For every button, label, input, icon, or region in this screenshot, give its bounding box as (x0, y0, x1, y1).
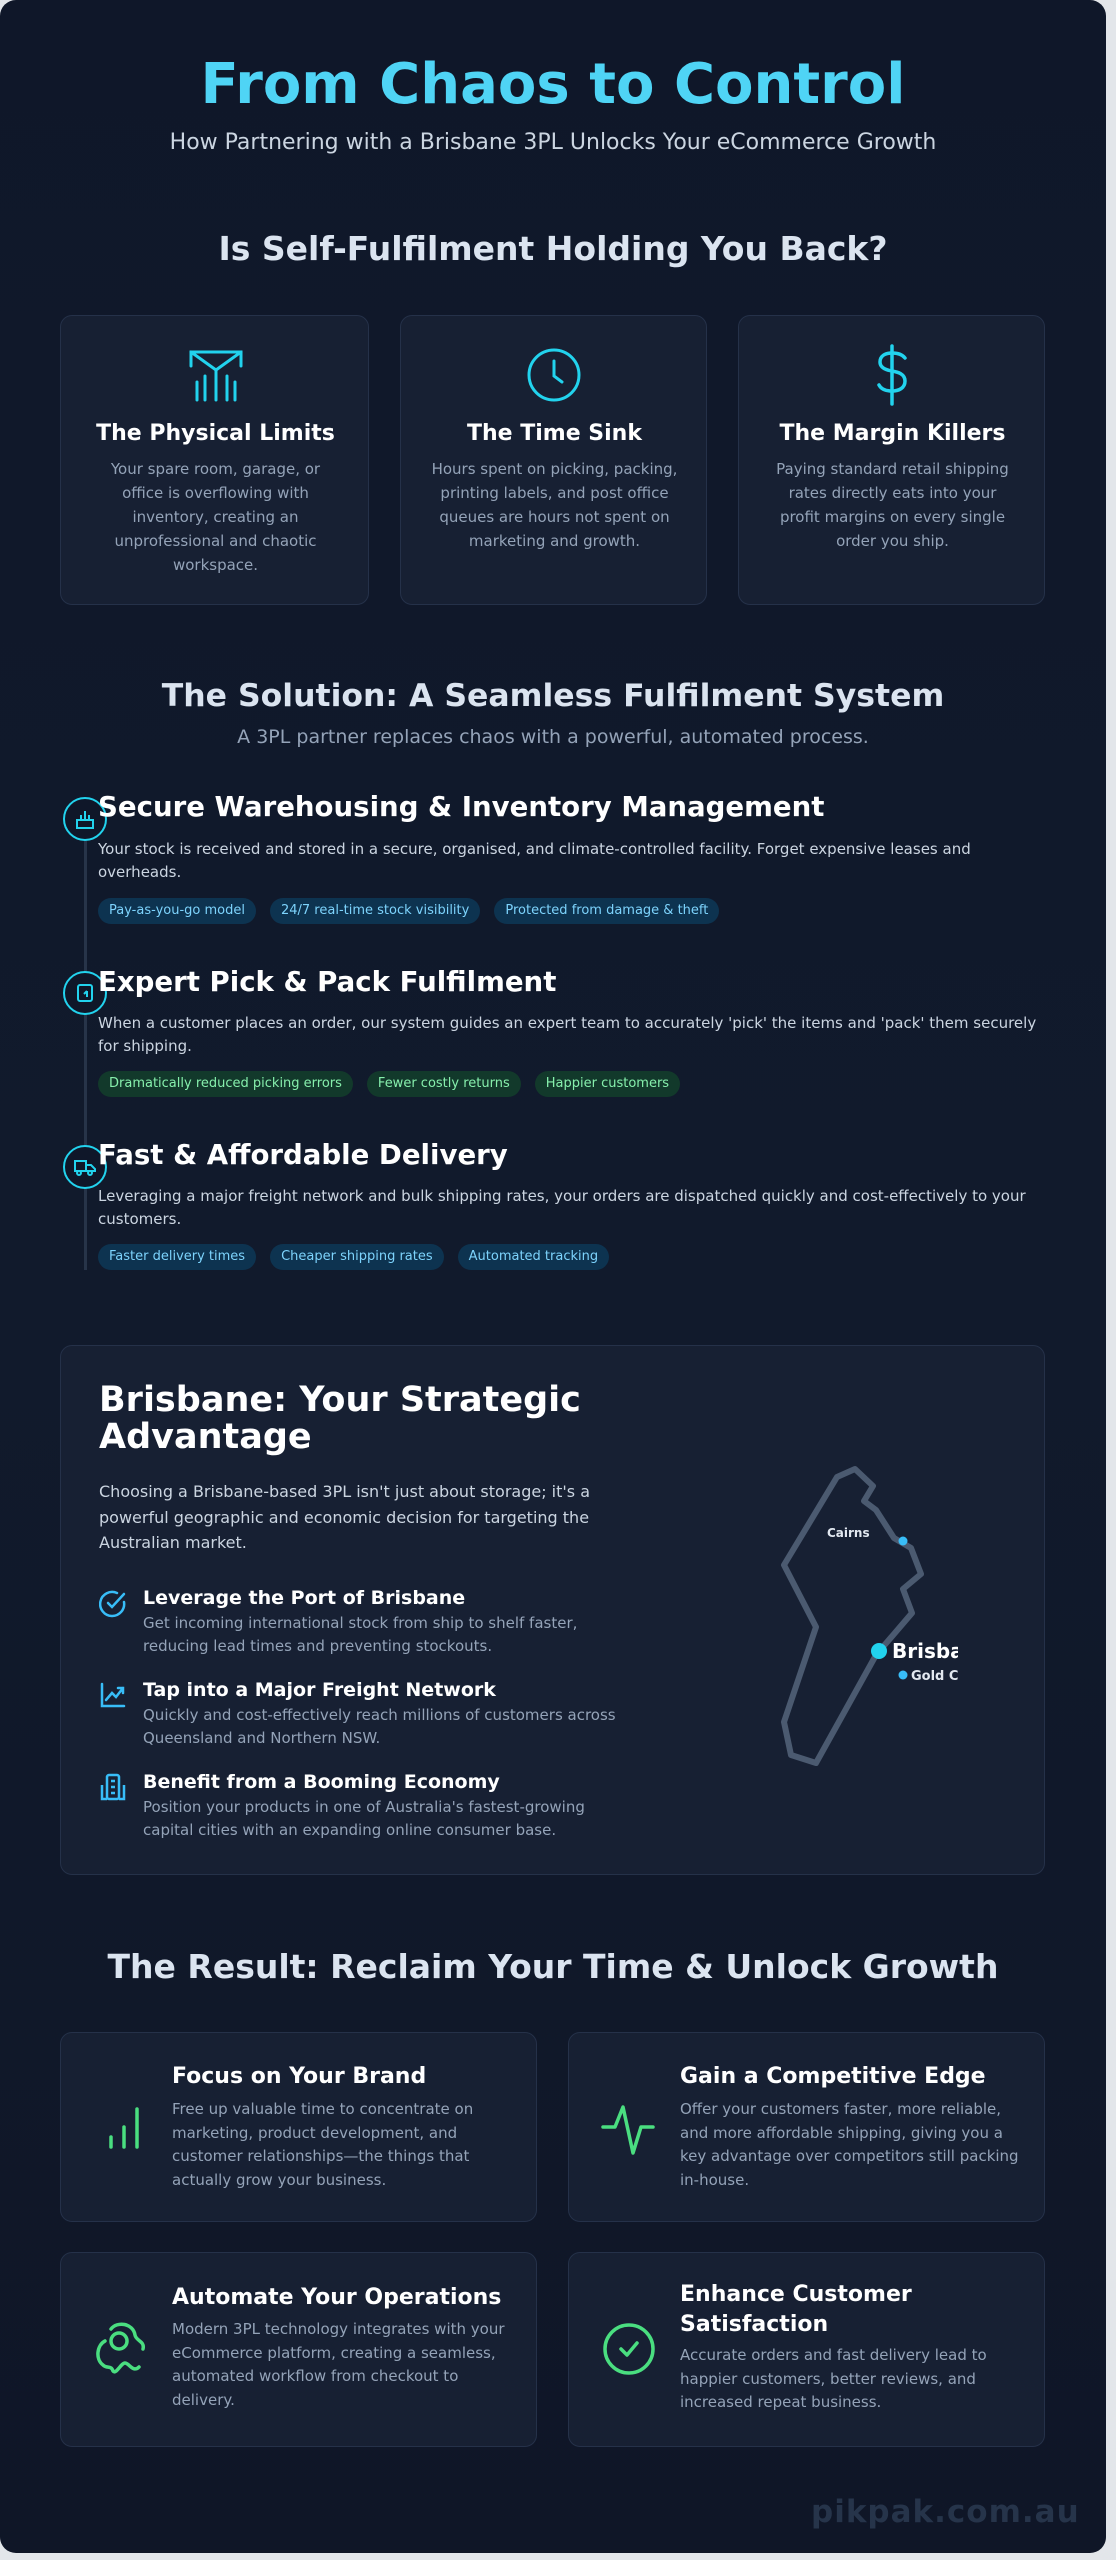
result: edge: Offer your customers faster, more reliable, and more affordable shipping, giving you a key advantage over competitors still packing in-house. (680, 2100, 1019, 2188)
step 1 text: Your stock is received and stored in a secure, organised, and climate-controlled facility. Forget expensive leases and overheads. (98, 840, 971, 881)
brisbane title: Advantage (99, 1417, 312, 1457)
icon: pulse (601, 2105, 655, 2155)
step 2 tags: Happier customers (546, 1076, 669, 1091)
footer brand: pikpak.com.au (811, 2494, 1080, 2530)
icon: clock (528, 348, 580, 402)
step 2 icon (63, 971, 107, 1015)
panel: margin killers: The Margin Killers (780, 421, 1005, 446)
timeline line (84, 800, 87, 1270)
result: satisfaction (568, 2252, 1045, 2447)
step 3 tags: Faster delivery times (109, 1249, 245, 1264)
step 2 text: When a customer places an order, our system guides an expert team to accurately 'pick' the items and 'pack' them securely for shipping. (98, 1014, 1036, 1055)
title: From Chaos to Control (201, 52, 905, 117)
icon: building (100, 1774, 126, 1800)
item: port (99, 1587, 577, 1655)
icon: automation (96, 2322, 145, 2374)
step 2 tags: Fewer costly returns (378, 1076, 510, 1091)
result: edge: Gain a Competitive Edge (680, 2064, 986, 2089)
step 1 tags: 24/7 real-time stock visibility (281, 903, 469, 918)
step 1 tags: Pay-as-you-go model (109, 903, 245, 918)
brisbane title: Brisbane: Your Strategic (99, 1380, 581, 1420)
step 3 tags: Cheaper shipping rates (281, 1249, 433, 1264)
step 2 tags (98, 1071, 680, 1097)
panel: time sink (400, 315, 707, 605)
item: freight: Tap into a Major Freight Network (143, 1679, 496, 1701)
step 3 title: Fast & Affordable Delivery (98, 1138, 508, 1171)
panel: physical limits: The Physical Limits (96, 421, 335, 446)
icon: warehouse (189, 350, 243, 402)
step 1 title: Secure Warehousing & Inventory Management (98, 790, 824, 823)
panel: margin killers (738, 315, 1045, 605)
icon: chart (100, 1682, 126, 1708)
item: economy (100, 1771, 585, 1839)
result: satisfaction: Accurate orders and fast delivery lead to happier customers, better reviews, and increased repeat business. (680, 2346, 987, 2411)
panel: physical limits: Your spare room, garage, or office is overflowing with inventory, creating an unprofessional and chaotic workspace. (111, 460, 320, 574)
heading: result: The Result: Reclaim Your Time & Unlock Growth (108, 1947, 998, 1986)
brisbane title (99, 1380, 581, 1457)
item: economy: Benefit from a Booming Economy (143, 1771, 500, 1793)
subtitle: How Partnering with a Brisbane 3PL Unlocks Your eCommerce Growth (170, 130, 936, 155)
panel: margin killers: Paying standard retail shipping rates directly eats into your profit margins on every single order you ship. (776, 460, 1009, 550)
map: queensland (781, 1466, 958, 1766)
step 2 title: Expert Pick & Pack Fulfilment (98, 965, 556, 998)
brisbane intro: Choosing a Brisbane-based 3PL isn't just about storage; it's a powerful geographic and economic decision for targeting the Australian market. (99, 1482, 590, 1552)
icon: check circle (603, 2323, 655, 2375)
result: satisfaction: Enhance Customer Satisfaction (680, 2282, 912, 2337)
step 3 tags: Automated tracking (469, 1249, 598, 1264)
item: economy: Position your products in one of Australia's fastest-growing capital cities with an expanding online consumer base. (143, 1798, 585, 1839)
step 3 text: Leveraging a major freight network and bulk shipping rates, your orders are dispatched quickly and cost-effectively to your customers. (98, 1187, 1026, 1228)
map: queensland: Cairns (827, 1526, 870, 1540)
step 1 tags (98, 898, 719, 924)
step 1 tags: Protected from damage & theft (505, 903, 708, 918)
result: brand: Focus on Your Brand (172, 2064, 426, 2089)
result: brand: Free up valuable time to concentrate on marketing, product development, and customer relationships—the things that actually grow your business. (172, 2100, 473, 2188)
step 1 icon (63, 797, 107, 841)
item: freight (100, 1679, 616, 1747)
panel: time sink: The Time Sink (467, 421, 642, 446)
step 2 tags: Dramatically reduced picking errors (109, 1076, 342, 1091)
solution subtitle: A 3PL partner replaces chaos with a powerful, automated process. (237, 726, 869, 748)
step 3 tags (98, 1244, 609, 1270)
panel: brisbane advantage (60, 1345, 1045, 1875)
result: automate (60, 2252, 537, 2447)
result: edge (568, 2032, 1045, 2222)
heading: solution: The Solution: A Seamless Fulfilment System (162, 678, 944, 714)
icon: dollar (877, 344, 907, 406)
item: port: Leverage the Port of Brisbane (143, 1587, 465, 1609)
result: automate: Modern 3PL technology integrates with your eCommerce platform, creating a seamless, automated workflow from checkout to delivery. (172, 2320, 504, 2408)
icon: check (99, 1590, 126, 1618)
result: brand (60, 2032, 537, 2222)
item: freight: Quickly and cost-effectively reach millions of customers across Queensland and Northern NSW. (143, 1706, 616, 1747)
step 3 icon (63, 1145, 107, 1189)
item: port: Get incoming international stock from ship to shelf faster, reducing lead times and preventing stockouts. (143, 1614, 577, 1655)
panel: time sink: Hours spent on picking, packing, printing labels, and post office queues are hours not spent on marketing and growth. (432, 460, 677, 550)
result: automate: Automate Your Operations (172, 2285, 501, 2310)
icon: bars (109, 2107, 139, 2149)
heading: problems: Is Self-Fulfilment Holding You Back? (218, 229, 888, 268)
panel: physical limits (60, 315, 369, 605)
